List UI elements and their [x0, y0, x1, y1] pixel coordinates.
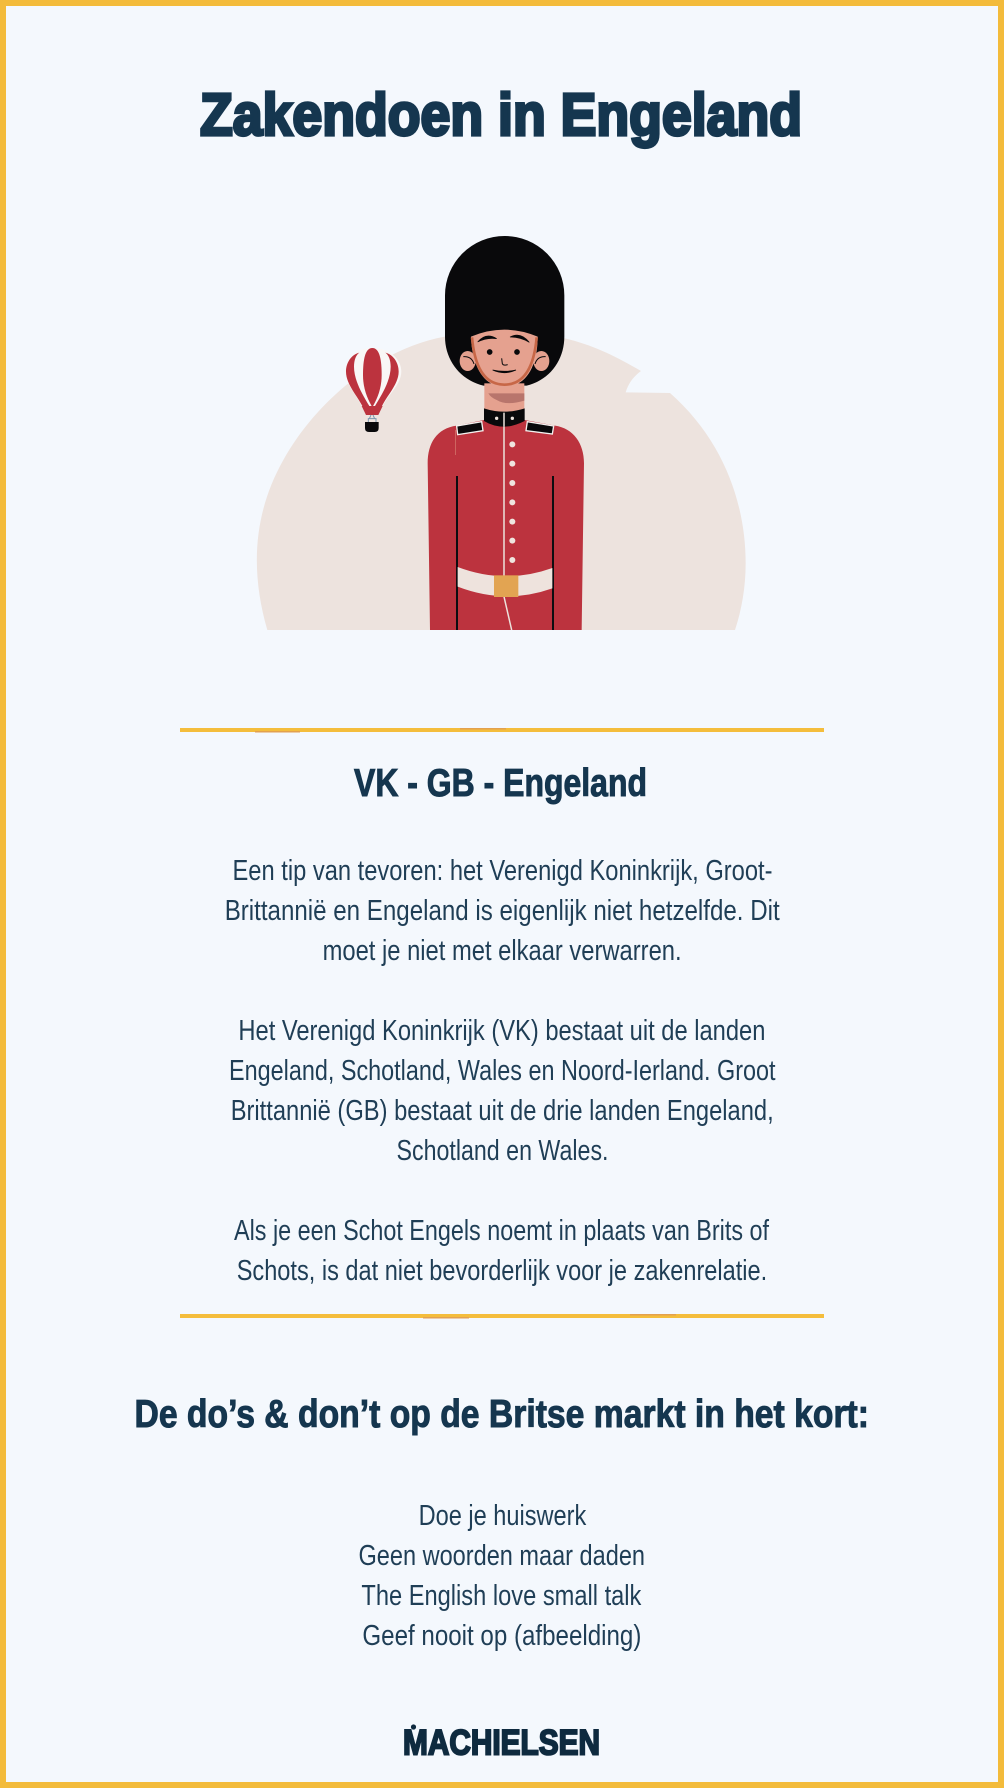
icon: hot air balloon — [345, 348, 401, 432]
heading: do's and don'ts: De do’s & don’t op de Britse markt in het kort: — [134, 1393, 869, 1436]
guard: ears — [460, 351, 549, 371]
text block: intro tip — [225, 855, 780, 967]
guard: bearskin hat — [445, 236, 564, 386]
illustration: guard with balloon — [257, 236, 746, 630]
buckle — [494, 575, 518, 597]
list: do's and don'ts: Geen woorden maar daden — [358, 1540, 645, 1572]
background semicircle — [257, 337, 746, 630]
text block: intro tip: moet je niet met elkaar verwarren. — [323, 935, 682, 967]
guard: neck — [484, 383, 524, 412]
text block: Schot warning: Als je een Schot Engels noemt in plaats van Brits of — [234, 1215, 770, 1247]
text block: VK and GB: Schotland en Wales. — [396, 1135, 608, 1167]
guard: face — [471, 330, 538, 387]
text block: VK and GB: Engeland, Schotland, Wales en Noord-Ierland. Groot — [229, 1055, 776, 1087]
list: do's and don'ts — [358, 1500, 645, 1652]
text block: VK and GB — [229, 1015, 776, 1167]
text block: intro tip: Brittannië en Engeland is eigenlijk niet hetzelfde. Dit — [225, 895, 780, 927]
arm lines — [457, 476, 553, 630]
mouth — [493, 370, 516, 373]
list: do's and don'ts: The English love small talk — [361, 1580, 642, 1612]
text block: VK and GB: Het Verenigd Koninkrijk (VK) bestaat uit de landen — [238, 1015, 765, 1047]
divider bottom — [180, 1314, 824, 1318]
guard: jacket — [428, 413, 584, 630]
list: do's and don'ts: Geef nooit op (afbeelding) — [362, 1620, 641, 1652]
nose — [502, 358, 508, 365]
heading: VK - GB - Engeland: VK - GB - Engeland — [354, 762, 647, 805]
eyes — [487, 349, 492, 355]
divider top — [180, 728, 824, 732]
chin strap — [472, 337, 537, 385]
text block: Schot warning: Schots, is dat niet bevorderlijk voor je zakenrelatie. — [237, 1255, 767, 1287]
belt — [458, 567, 552, 596]
text block: Schot warning — [234, 1215, 770, 1287]
title: Zakendoen in Engeland — [200, 82, 802, 148]
jacket seam — [504, 413, 512, 630]
buttons — [509, 441, 515, 563]
logo: Machielsen: MACHIELSEN — [403, 1723, 600, 1762]
list: do's and don'ts: Doe je huiswerk — [419, 1500, 587, 1532]
guard: collar — [484, 408, 525, 427]
epaulettes — [457, 422, 483, 435]
text block: intro tip: Een tip van tevoren: het Verenigd Koninkrijk, Groot- — [232, 855, 772, 887]
text block: VK and GB: Brittannië (GB) bestaat uit de drie landen Engeland, — [231, 1095, 774, 1127]
eyebrows — [478, 335, 529, 342]
